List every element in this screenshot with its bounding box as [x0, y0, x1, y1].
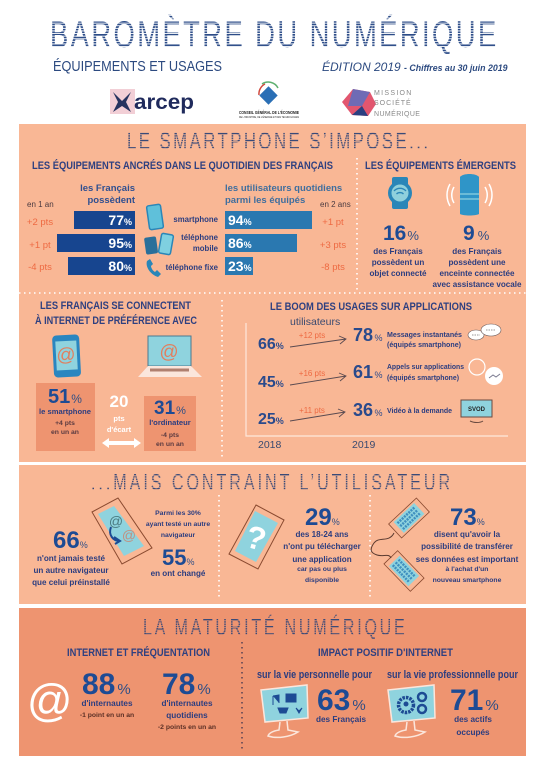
- stat: 29%: [283, 504, 362, 584]
- stat: 78%: -2 points en un an: [158, 724, 216, 731]
- stat box: 31%: en un an: [156, 441, 184, 448]
- stat: 16%: 16%: [383, 222, 419, 245]
- logo: conseil général de l'économie: DE L'INDUSTRIE, DE L'ÉNERGIE ET DES TECHNOLOGIES: [239, 114, 299, 119]
- stat: 73%: [416, 504, 519, 584]
- icon: enceinte connectée: [447, 174, 492, 216]
- stat: 66%: un autre navigateur: [33, 566, 109, 575]
- chart: usages applications: +11 pts: [299, 406, 325, 415]
- heading: connexion internet: [35, 300, 197, 327]
- logo: arcep: arcep: [134, 91, 194, 114]
- stat: 29%: car pas ou plus: [297, 566, 347, 573]
- stat: 66%: [32, 527, 110, 587]
- stat: 29%: 29%: [305, 504, 340, 531]
- chart: usages applications: [246, 316, 508, 451]
- panel: le smartphone s'impose: [19, 124, 526, 462]
- chart: les Français possèdent: 77%: [108, 212, 132, 228]
- chart: usages applications: 61%: [353, 362, 383, 382]
- stat: 63%: 63%: [317, 684, 366, 717]
- stat: 16%: [369, 222, 427, 278]
- icon: téléphone fixe: [147, 259, 161, 277]
- heading: équipements ancrés: LES ÉQUIPEMENTS ANCRÉS DANS LE QUOTIDIEN DES FRANÇAIS: [32, 159, 333, 172]
- chart: utilisateurs quotidiens: 86%: [228, 235, 252, 251]
- icon: écran vie personnelle: [261, 685, 308, 737]
- chart: usages applications: Messages instantanés: [387, 330, 462, 339]
- stat: 66%: n'ont jamais testé: [37, 554, 106, 563]
- stat: 9%: avec assistance vocale: [432, 280, 522, 289]
- heading: impact positif: IMPACT POSITIF D'INTERNET: [318, 647, 453, 659]
- chart: utilisateurs quotidiens: parmi les équipés: [225, 195, 305, 206]
- chart: utilisateurs quotidiens: [225, 183, 351, 275]
- chart: utilisateurs quotidiens: +3 pts: [320, 240, 346, 251]
- stat: 16%: possèdent un: [372, 258, 424, 267]
- stat box: 51%: +4 pts: [55, 420, 75, 427]
- stat: 88%: [80, 668, 134, 719]
- logo: mission société numérique: SOCIÉTÉ: [374, 98, 412, 107]
- chart: les Français possèdent: 80%: [108, 258, 132, 274]
- logo: arcep: [110, 89, 194, 114]
- label: vie professionnelle: sur la vie professionnelle pour: [387, 669, 519, 681]
- gap: 20 pts: d'écart: [107, 425, 132, 434]
- section heading: ...MAIS CONTRAINT L’UTILISATEUR: [91, 470, 450, 496]
- stat: 9%: possèdent une: [448, 258, 506, 267]
- chart: utilisateurs quotidiens: les utilisateurs quotidiens: [225, 183, 342, 194]
- stat box: 31%: -4 pts: [161, 432, 179, 439]
- icon: ordinateur @: @: [159, 342, 179, 363]
- gap: 20 pts: pts: [113, 414, 125, 423]
- stat: 78%: [158, 668, 216, 731]
- title: BAROMÈTRE DU NUMÉRIQUE: [50, 14, 496, 55]
- chart: les Français possèdent: en 1 an: [27, 200, 54, 209]
- stat: 78%: 78%: [162, 668, 211, 701]
- chart: utilisateurs quotidiens: +1 pt: [322, 217, 344, 228]
- panel: mais contraint l'utilisateur: [19, 465, 526, 604]
- stat: 9%: enceinte connectée: [439, 269, 515, 278]
- stat: 73%: possibilité de transférer: [421, 542, 514, 551]
- chart: usages applications: 45%: [258, 374, 284, 391]
- stat: 88%: d'internautes: [81, 699, 133, 708]
- icon: téléphone point d'interrogation: ?: [242, 518, 270, 558]
- heading: connexion internet: LES FRANÇAIS SE CONNECTENT: [40, 300, 191, 312]
- chart: usages applications: 78%: [353, 325, 383, 345]
- chart: usages applications: 36%: [353, 400, 383, 420]
- chart: les Français possèdent: +1 pt: [29, 240, 51, 251]
- stat box: 51%: en un an: [51, 429, 79, 436]
- chart: usages applications: Vidéo à la demande: [387, 406, 452, 415]
- stat: 55%: Parmi les 30%: [155, 510, 201, 517]
- icon: téléphones mobiles: [144, 233, 174, 255]
- stat: 73%: à l'achat d'un: [446, 566, 488, 573]
- icon: smartphone @: [52, 334, 81, 378]
- stat: 16%: objet connecté: [369, 269, 427, 278]
- icon: écran SVOD: [461, 400, 492, 422]
- chart: usages applications: Appels sur applications: [387, 362, 464, 371]
- stat box: 51%: [36, 383, 95, 451]
- logo: conseil général de l'économie: [239, 82, 299, 119]
- icon: téléphone point d'interrogation: [229, 505, 284, 569]
- chart: utilisateurs quotidiens: 94%: [228, 212, 252, 228]
- stat: 29%: n'ont pu télécharger: [283, 542, 362, 551]
- icon: smartphone: [146, 204, 164, 230]
- chart: les Français possèdent: possèdent: [87, 195, 136, 206]
- stat: 88%: 88%: [82, 668, 131, 701]
- logo: mission société numérique: MISSION: [374, 90, 413, 97]
- icon: écran vie professionnelle: [388, 685, 435, 737]
- icon: téléphone navigateur: @: [109, 513, 123, 529]
- label: vie personnelle: sur la vie personnelle pour: [257, 669, 373, 681]
- chart: utilisateurs quotidiens: 23%: [228, 258, 252, 274]
- logo: mission société numérique: [342, 89, 420, 118]
- logo: mission société numérique: NUMÉRIQUE: [374, 109, 420, 118]
- icon: téléphone navigateur: @: [122, 527, 136, 543]
- gap: 20 pts: [102, 392, 141, 448]
- stat: 55%: ayant testé un autre: [146, 521, 210, 528]
- stat: 16%: des Français: [373, 247, 423, 256]
- icon: arobase: @: [26, 675, 72, 726]
- chart: les Français possèdent: -4 pts: [28, 262, 52, 273]
- stat box: 31%: l'ordinateur: [149, 418, 191, 427]
- stat: 71%: 71%: [450, 684, 499, 717]
- labels: téléphone: [181, 233, 219, 242]
- icon: téléphone navigateur: [92, 498, 152, 564]
- icon: ordinateur @: [138, 336, 202, 377]
- stat: 66%: 66%: [53, 527, 88, 554]
- chart: les Français possèdent: 95%: [108, 235, 132, 251]
- stat: 78%: quotidiens: [166, 711, 208, 720]
- chart: usages applications: 2019: [352, 439, 376, 451]
- stat: 73%: ses données est important: [416, 555, 519, 564]
- stat: 9%: 9%: [463, 222, 490, 245]
- section heading: LA MATURITÉ NUMÉRIQUE: [143, 614, 405, 641]
- logo: conseil général de l'économie: CONSEIL GÉNÉRAL DE L'ÉCONOMIE: [239, 108, 299, 115]
- chart: usages applications: (équipés smartphone): [387, 340, 461, 349]
- icon: bulles de message: [468, 324, 501, 340]
- gap: 20 pts: 20: [110, 392, 128, 411]
- labels: [166, 215, 219, 272]
- chart: les Français possèdent: les Français: [80, 183, 135, 194]
- chart: usages applications: 25%: [258, 411, 284, 428]
- chart: les Français possèdent: +2 pts: [27, 217, 53, 228]
- icon: montre connectée: [388, 177, 412, 209]
- stat: 73%: nouveau smartphone: [433, 577, 502, 584]
- stat: 9%: des Français: [452, 247, 502, 256]
- panel: la maturité numérique: [19, 608, 526, 756]
- stat: 55%: 55%: [162, 545, 194, 570]
- stat: 29%: une application: [292, 555, 352, 564]
- chart: usages applications: +16 pts: [299, 369, 325, 378]
- stat: 66%: que celui préinstallé: [32, 578, 110, 587]
- stat box: 51%: 51%: [48, 386, 82, 408]
- icon: écran SVOD: SVOD: [468, 407, 486, 413]
- heading: internet et fréquentation: INTERNET ET FRÉQUENTATION: [67, 646, 210, 659]
- stat: 29%: des 18-24 ans: [295, 530, 349, 539]
- stat: 73%: 73%: [450, 504, 485, 531]
- stat: 9%: [432, 222, 522, 289]
- stat box: 31%: [144, 396, 196, 451]
- stat box: 31%: 31%: [154, 398, 186, 419]
- stat: 29%: disponible: [305, 577, 339, 584]
- chart: usages applications: 2018: [258, 439, 282, 451]
- chart: utilisateurs quotidiens: -8 pts: [321, 262, 345, 273]
- edition: ÉDITION 2019 - Chiffres au 30 juin 2019: [322, 59, 508, 74]
- stat: 71%: [450, 684, 499, 737]
- heading: connexion internet: À INTERNET DE PRÉFÉRENCE AVEC: [35, 314, 197, 327]
- stat: 63%: des Français: [316, 715, 366, 724]
- chart: utilisateurs quotidiens: en 2 ans: [320, 200, 351, 209]
- heading: boom des usages: LE BOOM DES USAGES SUR APPLICATIONS: [270, 301, 472, 313]
- stat box: 51%: le smartphone: [39, 407, 91, 416]
- stat: 71%: occupés: [456, 728, 490, 737]
- stat: 88%: -1 point en un an: [80, 712, 134, 719]
- chart: les Français possèdent: [27, 183, 136, 275]
- chart: usages applications: utilisateurs: [290, 316, 340, 328]
- stat: 55%: navigateur: [161, 532, 196, 539]
- icon: applications d'appel: [469, 359, 503, 385]
- icon: transfert entre téléphones: [371, 498, 429, 591]
- subtitle: ÉQUIPEMENTS ET USAGES: [53, 58, 222, 75]
- section heading: LE SMARTPHONE S’IMPOSE...: [127, 128, 428, 155]
- labels: mobile: [193, 244, 219, 253]
- chart: usages applications: (équipés smartphone): [387, 373, 459, 382]
- stat: 78%: d'internautes: [161, 699, 213, 708]
- labels: smartphone: [173, 215, 219, 224]
- stat: 73%: disent qu'avoir la: [434, 530, 501, 539]
- chart: usages applications: 66%: [258, 336, 284, 353]
- labels: téléphone fixe: [166, 263, 219, 272]
- stat: 55%: [146, 510, 210, 578]
- stat: 71%: des actifs: [454, 715, 492, 724]
- icon: smartphone @: @: [56, 345, 76, 366]
- stat: 55%: en ont changé: [151, 569, 206, 578]
- heading: équipements émergents: LES ÉQUIPEMENTS ÉMERGENTS: [365, 159, 516, 172]
- chart: usages applications: +12 pts: [299, 331, 325, 340]
